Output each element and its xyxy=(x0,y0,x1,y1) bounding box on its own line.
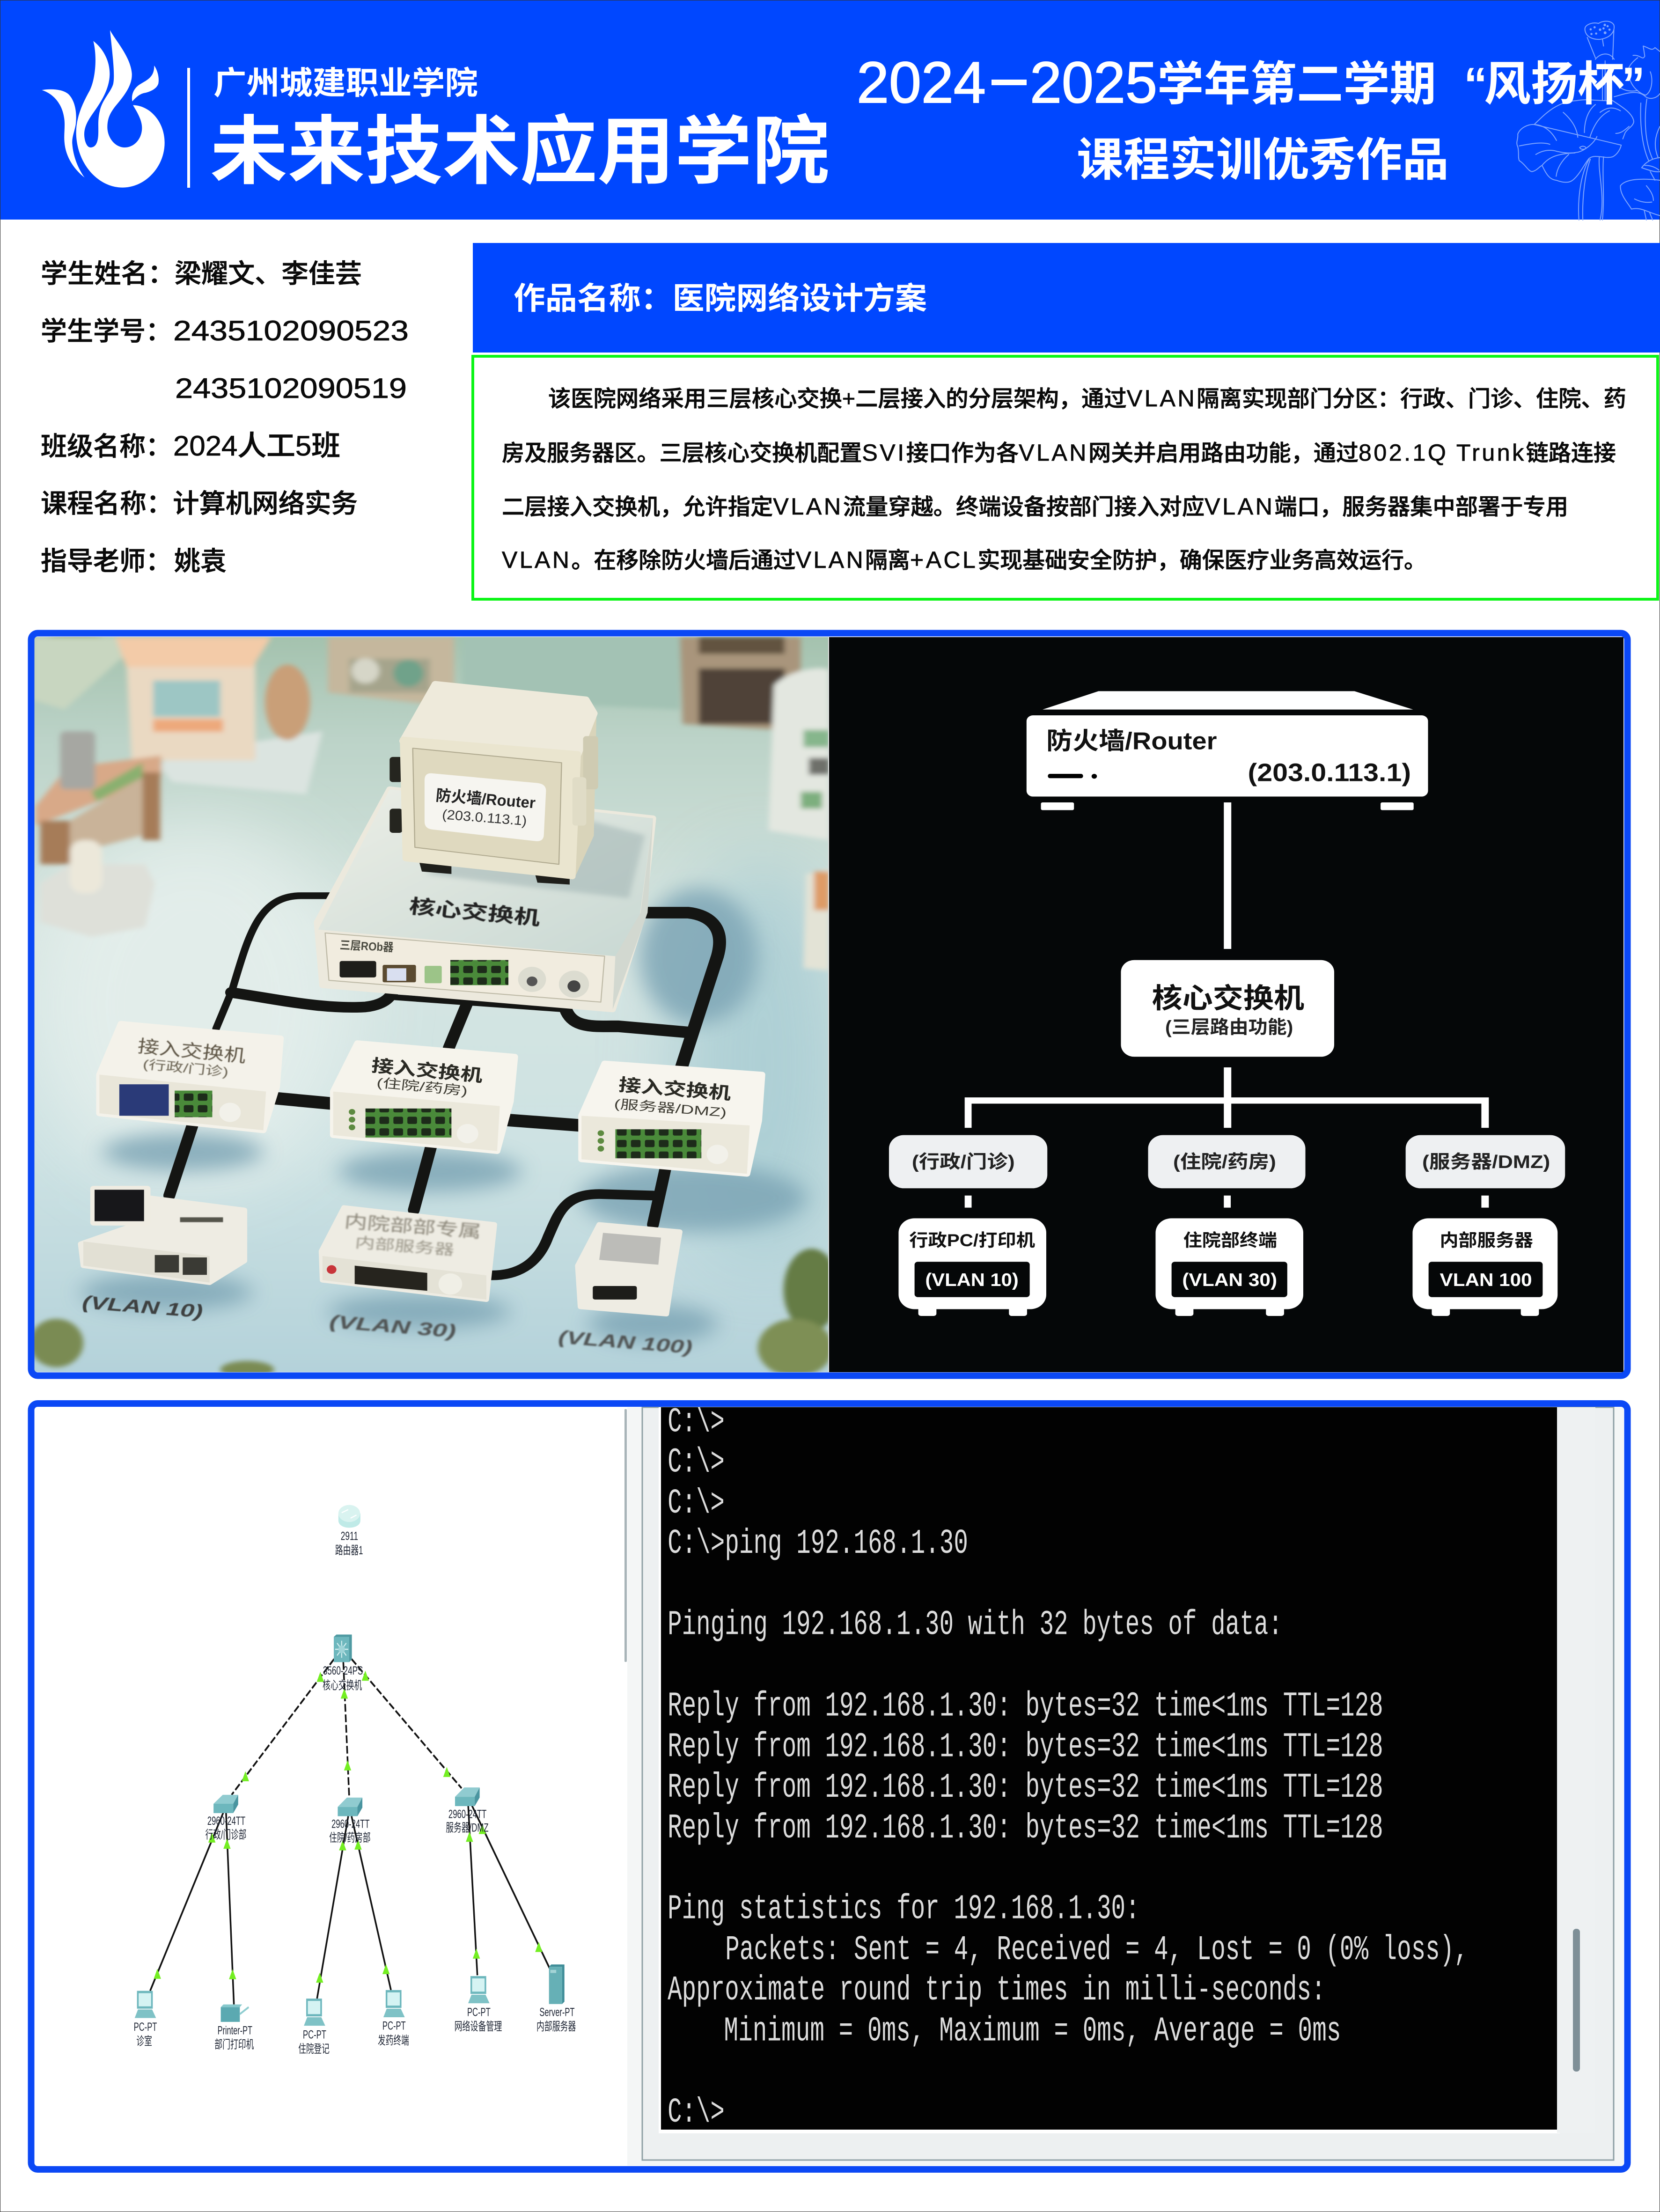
event title: 学年第二学期 xyxy=(1157,58,1436,110)
server xyxy=(536,1964,576,2033)
student name: 学生姓名：梁耀文、李佳芸 xyxy=(41,259,362,288)
access switch servers: 2960-24TT xyxy=(448,1808,486,1821)
access switch admin xyxy=(206,1795,246,1841)
panel border xyxy=(31,633,1627,1375)
pc: clinic: PC-PT xyxy=(134,2020,157,2033)
label: vlan 100: (VLAN 100) xyxy=(558,1326,693,1358)
pc: network management: 网络设备管理 xyxy=(455,2020,502,2033)
course name: 课程名称：计算机网络实务 xyxy=(41,489,358,518)
diagram: logical network topology xyxy=(828,637,1623,1372)
command prompt: ping output: C:\>ping 192.168.1.30 xyxy=(668,1524,968,1564)
access switch admin: 2960-24TT xyxy=(207,1814,245,1827)
teacher: 姚袁 xyxy=(174,546,227,576)
teacher: 指导老师： xyxy=(41,546,172,576)
device: access switch servers: (服务器/DMZ) xyxy=(613,1097,727,1120)
logo: flame xyxy=(42,30,165,188)
student id 2: 2435102090519 xyxy=(175,373,407,404)
access switch wards: 住院/药房部 xyxy=(329,1831,371,1845)
school name: 广州城建职业学院 xyxy=(213,66,478,101)
node: server zone: (服务器/DMZ) xyxy=(1422,1152,1550,1172)
student information xyxy=(41,259,409,576)
device: server box xyxy=(578,1225,680,1314)
header banner xyxy=(0,0,1660,220)
node: core switch xyxy=(1121,960,1334,1057)
access switch wards xyxy=(329,1798,371,1845)
soft shadows xyxy=(81,889,806,1343)
access switch admin: 行政/门诊部 xyxy=(206,1828,246,1841)
student id 1: 2435102090523 xyxy=(173,315,409,346)
command prompt: ping output: C:\> xyxy=(668,1403,725,1442)
router 2911 xyxy=(335,1505,363,1557)
printer: 部门打印机 xyxy=(214,2038,254,2051)
event title: 2024 xyxy=(857,51,986,115)
pc: pharmacy terminal xyxy=(378,1990,409,2047)
node: core switch: (三层路由功能) xyxy=(1165,1017,1293,1037)
node: admin zone: (行政/门诊) xyxy=(912,1152,1015,1172)
pc: pharmacy terminal: 发药终端 xyxy=(378,2034,409,2047)
panel: simulation results xyxy=(31,1403,1627,2169)
device: pc vlan 10 xyxy=(81,1186,244,1283)
node: admin PCs VLAN 10: (VLAN 10) xyxy=(925,1270,1019,1290)
node: ward terminals VLAN 30: 住院部终端 xyxy=(1183,1231,1277,1250)
panel border xyxy=(31,1404,1627,2169)
device: access switch admin xyxy=(99,1024,280,1130)
label: blurred server text: 内院部部专属 xyxy=(344,1212,482,1242)
server: Server-PT xyxy=(539,2006,574,2019)
device: core switch xyxy=(317,789,653,1009)
command prompt: ping output xyxy=(661,1403,1557,2132)
device: core switch: 三层ROb器 xyxy=(339,938,394,954)
college name: 未来技术应用学院 xyxy=(210,110,830,193)
label: admin switch: 接入交换机 xyxy=(137,1036,247,1066)
core switch 3560: 核心交换机 xyxy=(323,1679,362,1692)
simulator window chrome xyxy=(624,1407,1623,2166)
printer: Printer-PT xyxy=(218,2024,252,2037)
node: admin PCs VLAN 10: 行政PC/打印机 xyxy=(909,1231,1035,1250)
node: admin zone xyxy=(889,1135,1047,1188)
pc: clinic: 诊室 xyxy=(136,2035,152,2048)
project description box xyxy=(473,356,1658,599)
pc: network management: PC-PT xyxy=(467,2006,491,2019)
pc: clinic xyxy=(134,1991,157,2048)
event title: 风扬杯 xyxy=(1484,58,1624,110)
class name: 2024人工5班 xyxy=(173,430,340,462)
label: servers switch: 接入交换机 xyxy=(617,1075,732,1103)
command prompt: ping output: C:\> xyxy=(668,2093,725,2132)
device: access switch admin: (行政/门诊) xyxy=(142,1058,229,1080)
project description box: VLAN。在移除防火墙后通过VLAN隔离+ACL实现基础安全防护，确保医疗业务高效运行。 xyxy=(502,547,1426,573)
label: firewall/router: 防火墙/Router xyxy=(435,787,536,812)
pc: ward registration: 住院登记 xyxy=(298,2043,330,2056)
photo: 3D miniature network model xyxy=(29,632,849,1378)
access switch wards: 2960-24TT xyxy=(331,1817,370,1830)
node: firewall router: 防火墙/Router xyxy=(1046,728,1217,755)
label: vlan 30: (VLAN 30) xyxy=(329,1311,457,1342)
pc: pharmacy terminal: PC-PT xyxy=(382,2019,406,2032)
project description box: 房及服务器区。三层核心交换机配置SVI接口作为各VLAN网关并启用路由功能，通过802.1Q Trunk链路连接 xyxy=(502,440,1616,466)
node: server zone xyxy=(1406,1135,1565,1188)
event title: 2025 xyxy=(1030,51,1157,115)
pc: ward registration xyxy=(298,1999,330,2056)
lotus line art xyxy=(1517,21,1660,220)
node: internal servers VLAN 100 xyxy=(1412,1218,1557,1316)
router 2911: 2911 xyxy=(341,1529,358,1543)
event title xyxy=(857,51,1645,115)
node: internal servers VLAN 100: VLAN 100 xyxy=(1440,1270,1532,1290)
label: core switch: 核心交换机 xyxy=(408,896,542,929)
label: wards switch: 接入交换机 xyxy=(370,1056,484,1086)
logo divider xyxy=(187,68,190,188)
printer xyxy=(214,2005,254,2051)
links xyxy=(150,1659,550,2005)
pc: network management xyxy=(455,1976,502,2033)
device: firewall router xyxy=(389,684,598,885)
class name: 班级名称： xyxy=(41,432,172,461)
link status triangles xyxy=(154,1671,543,1983)
event title: ” xyxy=(1622,58,1645,110)
command prompt: ping output: C:\> xyxy=(668,1484,725,1523)
access switch servers xyxy=(446,1787,489,1834)
student id 1: 学生学号： xyxy=(41,316,172,346)
pc: ward registration: PC-PT xyxy=(303,2028,326,2041)
panel: network diagrams xyxy=(29,632,1628,1378)
server: 内部服务器 xyxy=(536,2020,576,2033)
connector lines xyxy=(965,802,1489,1208)
label: vlan 10: (VLAN 10) xyxy=(81,1292,204,1322)
project description box: 该医院网络采用三层核心交换+二层接入的分层架构，通过VLAN隔离实现部门分区：行政、门诊、住院、药 xyxy=(548,385,1626,412)
device: access switch wards: (住院/药房) xyxy=(376,1076,468,1098)
core switch 3560 xyxy=(323,1635,363,1692)
subtitle: 课程实训优秀作品 xyxy=(1077,134,1449,185)
access switch servers: 服务器/DMZ xyxy=(446,1821,489,1834)
command prompt: ping output: Ping statistics for 192.168.1.30: xyxy=(668,1890,1140,1929)
project name bar xyxy=(473,243,1660,353)
device: internal server xyxy=(322,1208,494,1300)
node: ward terminals VLAN 30: (VLAN 30) xyxy=(1182,1270,1277,1290)
core switch 3560: 3560-24PS xyxy=(323,1664,363,1677)
device: access switch servers xyxy=(581,1064,762,1174)
project name: 作品名称：医院网络设计方案 xyxy=(514,281,927,316)
device: firewall router: (203.0.113.1) xyxy=(441,807,528,829)
node: core switch: 核心交换机 xyxy=(1152,983,1304,1014)
node: ward terminals VLAN 30 xyxy=(1155,1218,1303,1316)
node: admin PCs VLAN 10 xyxy=(898,1218,1046,1316)
device: access switch wards xyxy=(333,1043,515,1151)
node: firewall router xyxy=(1027,691,1428,810)
cables xyxy=(169,896,720,1275)
node: wards zone: (住院/药房) xyxy=(1173,1152,1276,1172)
node: internal servers VLAN 100: 内部服务器 xyxy=(1440,1231,1533,1250)
router 2911: 路由器1 xyxy=(335,1543,363,1557)
command prompt: ping output: C:\> xyxy=(668,1443,725,1482)
topology: packet tracer network xyxy=(134,1505,576,2056)
node: wards zone xyxy=(1148,1135,1306,1188)
project description box: 二层接入交换机，允许指定VLAN流量穿越。终端设备按部门接入对应VLAN端口，服务器集中部署于专用 xyxy=(502,493,1568,520)
node: firewall router: (203.0.113.1) xyxy=(1248,758,1411,786)
device: internal server: 内部服务器 xyxy=(354,1234,455,1258)
event title: “ xyxy=(1464,58,1487,110)
